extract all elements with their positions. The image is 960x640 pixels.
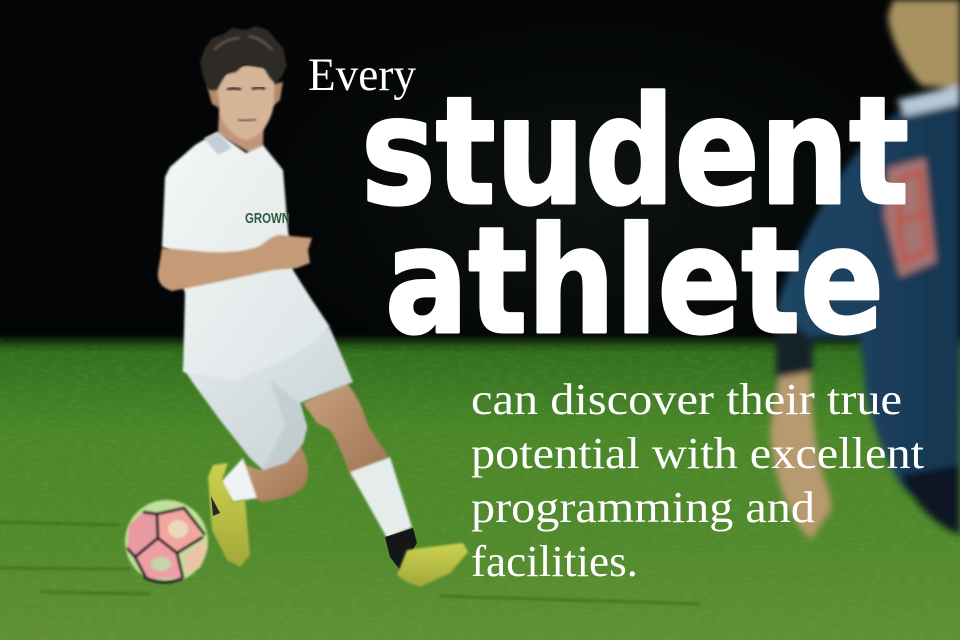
opponent collar [897,85,960,116]
shorts [183,328,353,470]
front thigh [303,383,388,480]
body copy: facilities. [471,537,638,586]
lower panel [135,538,183,579]
opponent forearm [770,372,831,540]
shirt [162,132,330,380]
soccer ball [125,500,208,583]
front boot [397,543,468,587]
hair highlights [214,36,272,50]
right lower tint [183,540,208,574]
mouth [238,119,256,121]
arm [158,235,312,291]
hair [200,26,287,90]
centre panel [157,508,203,553]
body copy: can discover their true [471,375,902,424]
body copy [471,375,924,586]
neck [218,112,264,153]
shirt shoulder panel [204,132,232,155]
left panel [127,512,158,557]
shorts shadow fold [263,380,307,470]
back sock [220,458,257,502]
back boot [208,463,250,567]
headline text block [308,49,909,367]
opponent sleeve band [776,305,814,378]
front sock [350,457,412,538]
main soccer player [158,26,468,587]
back boot logo [211,496,220,516]
jersey number 8 [884,158,936,277]
word: Every: Every [308,49,416,101]
ball seams [127,508,205,582]
ears [207,82,283,108]
face [216,65,275,140]
ankle wrap [385,528,417,570]
grass field [0,336,960,640]
opponent jersey [776,96,960,535]
body copy: potential with excellent [471,429,924,478]
body copy: programming and [471,483,815,532]
night background [0,0,960,390]
eyes [227,88,265,90]
opponent lower shadow [900,465,960,535]
opponent hair [888,0,960,88]
blurred opposing player [770,0,960,540]
head [200,26,287,140]
back calf [240,445,308,502]
shirt lettering: GROWN [245,210,290,227]
